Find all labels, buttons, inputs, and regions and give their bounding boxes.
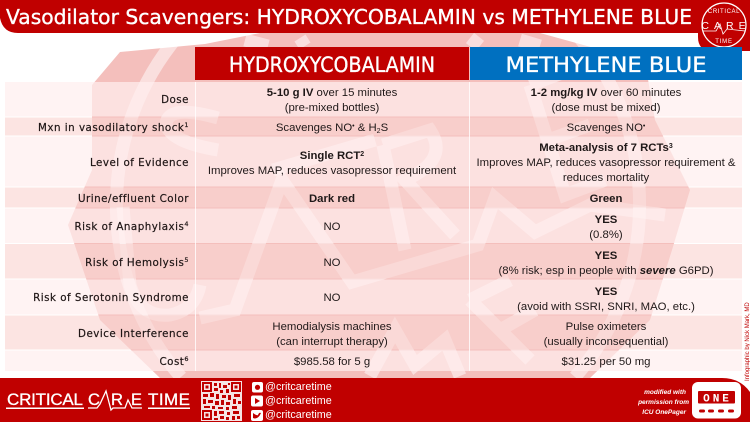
row: mechanism: 2 (377, 128, 381, 135)
row backgrounds (5, 82, 742, 371)
footer logo: critical care time: E (131, 390, 142, 409)
social handles: @critcaretime (265, 395, 332, 407)
row: serotonin syndrome: (avoid with SSRI, SNRI, MAO, etc.) (517, 301, 695, 313)
row: anaphylaxis (75, 214, 623, 241)
row: level of evidence: reduces mortality (563, 172, 650, 184)
row: anaphylaxis: YES (595, 214, 618, 226)
row: hemolysis (85, 250, 714, 277)
row: anaphylaxis: (0.8%) (589, 229, 623, 241)
row: mechanism (38, 121, 646, 135)
row: mechanism: & H (355, 122, 377, 134)
row: anaphylaxis: 4 (184, 220, 189, 228)
row: dose: 1-2 mg/kg IV over 60 minutes (531, 87, 682, 99)
row: cost: $31.25 per 50 mg (562, 356, 650, 368)
permission note: permission from (637, 399, 689, 406)
row: mechanism: Mxn in vasodilatory shock (38, 122, 184, 134)
row: device interference: Pulse oximeters (566, 321, 647, 333)
row: level of evidence: Meta-analysis of 7 RCTs (539, 142, 669, 154)
row: device interference: Device Interference (78, 328, 189, 340)
column header: methylene blue (470, 47, 742, 80)
row: anaphylaxis: Risk of Anaphylaxis (75, 221, 184, 233)
row: mechanism: 1 (184, 121, 189, 129)
social handles: @critcaretime (265, 381, 332, 393)
column header: hydroxycobalamin: HYDROXYCOBALAMIN (229, 53, 435, 77)
row: urine color: Urine/effluent Color (78, 193, 189, 205)
footer logo: critical care time: TIME (148, 390, 190, 409)
row: hemolysis: 5 (184, 256, 189, 264)
icon: one pager monitor: ONE (703, 394, 732, 406)
row: dose: Dose (161, 94, 189, 106)
row: level of evidence: Improves MAP, reduces vasopressor requirement (208, 165, 457, 177)
icon: critical care time round logo: CRITICAL (708, 9, 740, 15)
row: hemolysis: (8% risk; esp in people with severe G6PD) (498, 265, 714, 277)
column header: hydroxycobalamin (195, 47, 469, 80)
row: mechanism: S (381, 122, 389, 134)
row: level of evidence: Level of Evidence (90, 157, 189, 169)
row: urine color (78, 193, 622, 205)
row: dose: (dose must be mixed) (551, 102, 661, 114)
row: mechanism: • (643, 123, 646, 130)
row: serotonin syndrome: Risk of Serotonin Syndrome (33, 292, 189, 304)
row: serotonin syndrome (33, 286, 695, 313)
permission note: ICU OnePager (642, 409, 686, 416)
row: level of evidence (90, 142, 736, 184)
row: level of evidence: Single RCT (300, 150, 360, 162)
row: hemolysis: Risk of Hemolysis (85, 257, 184, 269)
row: level of evidence: 2 (360, 151, 364, 158)
row: cost: $985.58 for 5 g (294, 356, 370, 368)
icon: critical care time round logo: CARE (701, 20, 750, 32)
row: device interference: Hemodialysis machines (272, 321, 392, 333)
row: cost (159, 355, 650, 368)
row: level of evidence: Improves MAP, reduces vasopressor requirement & (477, 157, 736, 169)
row: device interference (78, 321, 669, 348)
row: anaphylaxis: NO (323, 221, 341, 233)
row: device interference: (usually inconsequential) (544, 336, 669, 348)
row: serotonin syndrome: YES (595, 286, 618, 298)
row: dose (161, 87, 682, 114)
row: hemolysis: NO (323, 257, 341, 269)
row: device interference: (can interrupt therapy) (276, 336, 388, 348)
social handles (251, 381, 332, 421)
row: dose: (pre-mixed bottles) (285, 102, 380, 114)
row: cost: Cost (159, 356, 184, 368)
footer logo: critical care time: CRITICAL (7, 390, 83, 409)
row: serotonin syndrome: NO (323, 292, 341, 304)
footer logo: critical care time: R (111, 390, 123, 409)
row: mechanism: Scavenges NO (276, 122, 352, 134)
column header: methylene blue: METHYLENE BLUE (506, 53, 706, 77)
row: urine color: Dark red (309, 193, 355, 205)
row: dose: 5-10 g IV over 15 minutes (267, 87, 398, 99)
icon: critical care time round logo: TIME (715, 39, 733, 45)
row: level of evidence: 3 (669, 143, 673, 150)
footer bar (0, 378, 750, 422)
watermark: care time logo (68, 33, 690, 378)
row: mechanism: Scavenges NO (567, 122, 643, 134)
icon: qr code (201, 381, 242, 421)
icon: critical care time round logo (698, 0, 750, 51)
social handles: @critcaretime (265, 409, 332, 421)
title bar (0, 0, 750, 33)
row: hemolysis: YES (595, 250, 618, 262)
icon: one pager monitor (692, 382, 741, 418)
row: cost: 6 (184, 355, 189, 363)
row: mechanism: • (352, 123, 355, 130)
footer logo: critical care time: C (88, 390, 100, 409)
permission note: modified with (644, 389, 686, 396)
row: urine color: Green (590, 193, 622, 205)
footer logo: critical care time (6, 390, 190, 410)
permission note (637, 389, 689, 416)
title text: Vasodilator Scavengers: HYDROXYCOBALAMIN vs METHYLENE BLUE (6, 5, 692, 29)
